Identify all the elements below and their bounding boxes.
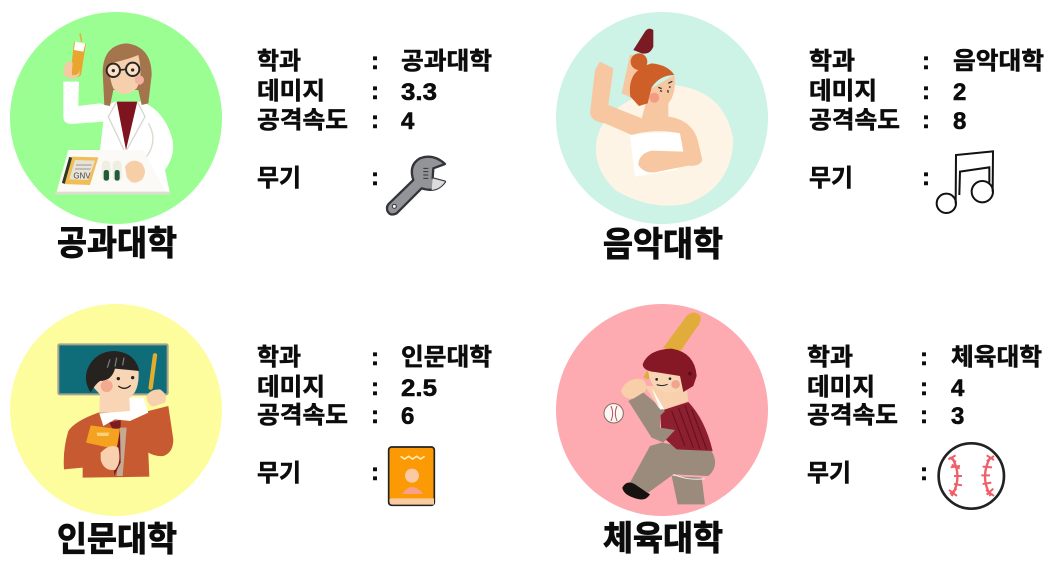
stats: 2: [953, 79, 966, 106]
stats: [257, 344, 492, 487]
portrait: engineer in lab coat: GNV: [73, 171, 91, 180]
stats: 8: [953, 108, 966, 135]
portrait: ballerina: [556, 12, 768, 224]
icon: music notes: [937, 151, 993, 213]
stats: :: [922, 164, 930, 191]
college name: 음악대학: [603, 226, 723, 264]
stats: 3: [951, 403, 964, 430]
stats: :: [922, 48, 930, 75]
stats: :: [922, 107, 930, 134]
panel: engineering college: [10, 12, 492, 263]
stats: :: [920, 402, 928, 429]
stats: 공격속도: [809, 107, 900, 134]
stats: 무기: [807, 460, 851, 487]
portrait: baseball batter: [556, 304, 768, 516]
stats: 학과: [257, 48, 301, 75]
stats: 2.5: [401, 375, 437, 402]
stats: 인문대학: [401, 344, 492, 371]
stats: 무기: [257, 165, 301, 192]
stats: :: [371, 48, 379, 75]
stats: 4: [401, 108, 415, 135]
portrait: engineer in lab coat: [10, 12, 222, 224]
stats: 4: [951, 375, 965, 402]
portrait: teacher at blackboard: [10, 304, 222, 516]
stats: :: [922, 78, 930, 105]
stats: 데미지: [809, 78, 877, 105]
stats: [257, 48, 492, 192]
panel: sports college: [556, 304, 1042, 558]
stats: 공과대학: [401, 48, 492, 75]
stats: 데미지: [257, 374, 325, 401]
stats: 무기: [257, 460, 301, 487]
stats: 데미지: [257, 78, 325, 105]
stats: [809, 48, 1044, 192]
stats: 음악대학: [953, 48, 1044, 75]
panel: humanities college: [10, 304, 492, 559]
stats: 학과: [807, 344, 853, 371]
stats: :: [371, 107, 379, 134]
stats: :: [371, 374, 379, 401]
panel: music college: [556, 12, 1044, 264]
stats: 공격속도: [257, 402, 348, 429]
stats: :: [920, 459, 928, 486]
college name: 체육대학: [603, 520, 723, 558]
stats: [807, 344, 1042, 487]
stats: :: [371, 344, 379, 371]
stats: :: [920, 344, 928, 371]
icon: baseball: [939, 443, 1004, 509]
college name: 공과대학: [57, 225, 177, 263]
stats: 학과: [257, 344, 301, 371]
college name: 인문대학: [57, 521, 177, 559]
stats: 6: [401, 403, 414, 430]
stats: :: [371, 78, 379, 105]
stats: :: [371, 459, 379, 486]
stats: 데미지: [807, 374, 875, 401]
stats: 학과: [809, 48, 855, 75]
stats: 무기: [809, 165, 853, 192]
stats: 체육대학: [951, 344, 1042, 371]
icon: wrench: [387, 157, 445, 215]
stats: :: [371, 164, 379, 191]
stats: :: [920, 374, 928, 401]
stats: 공격속도: [807, 402, 898, 429]
stats: 공격속도: [257, 107, 348, 134]
stats: 3.3: [401, 79, 437, 106]
stats: :: [371, 402, 379, 429]
icon: book: [389, 447, 434, 505]
